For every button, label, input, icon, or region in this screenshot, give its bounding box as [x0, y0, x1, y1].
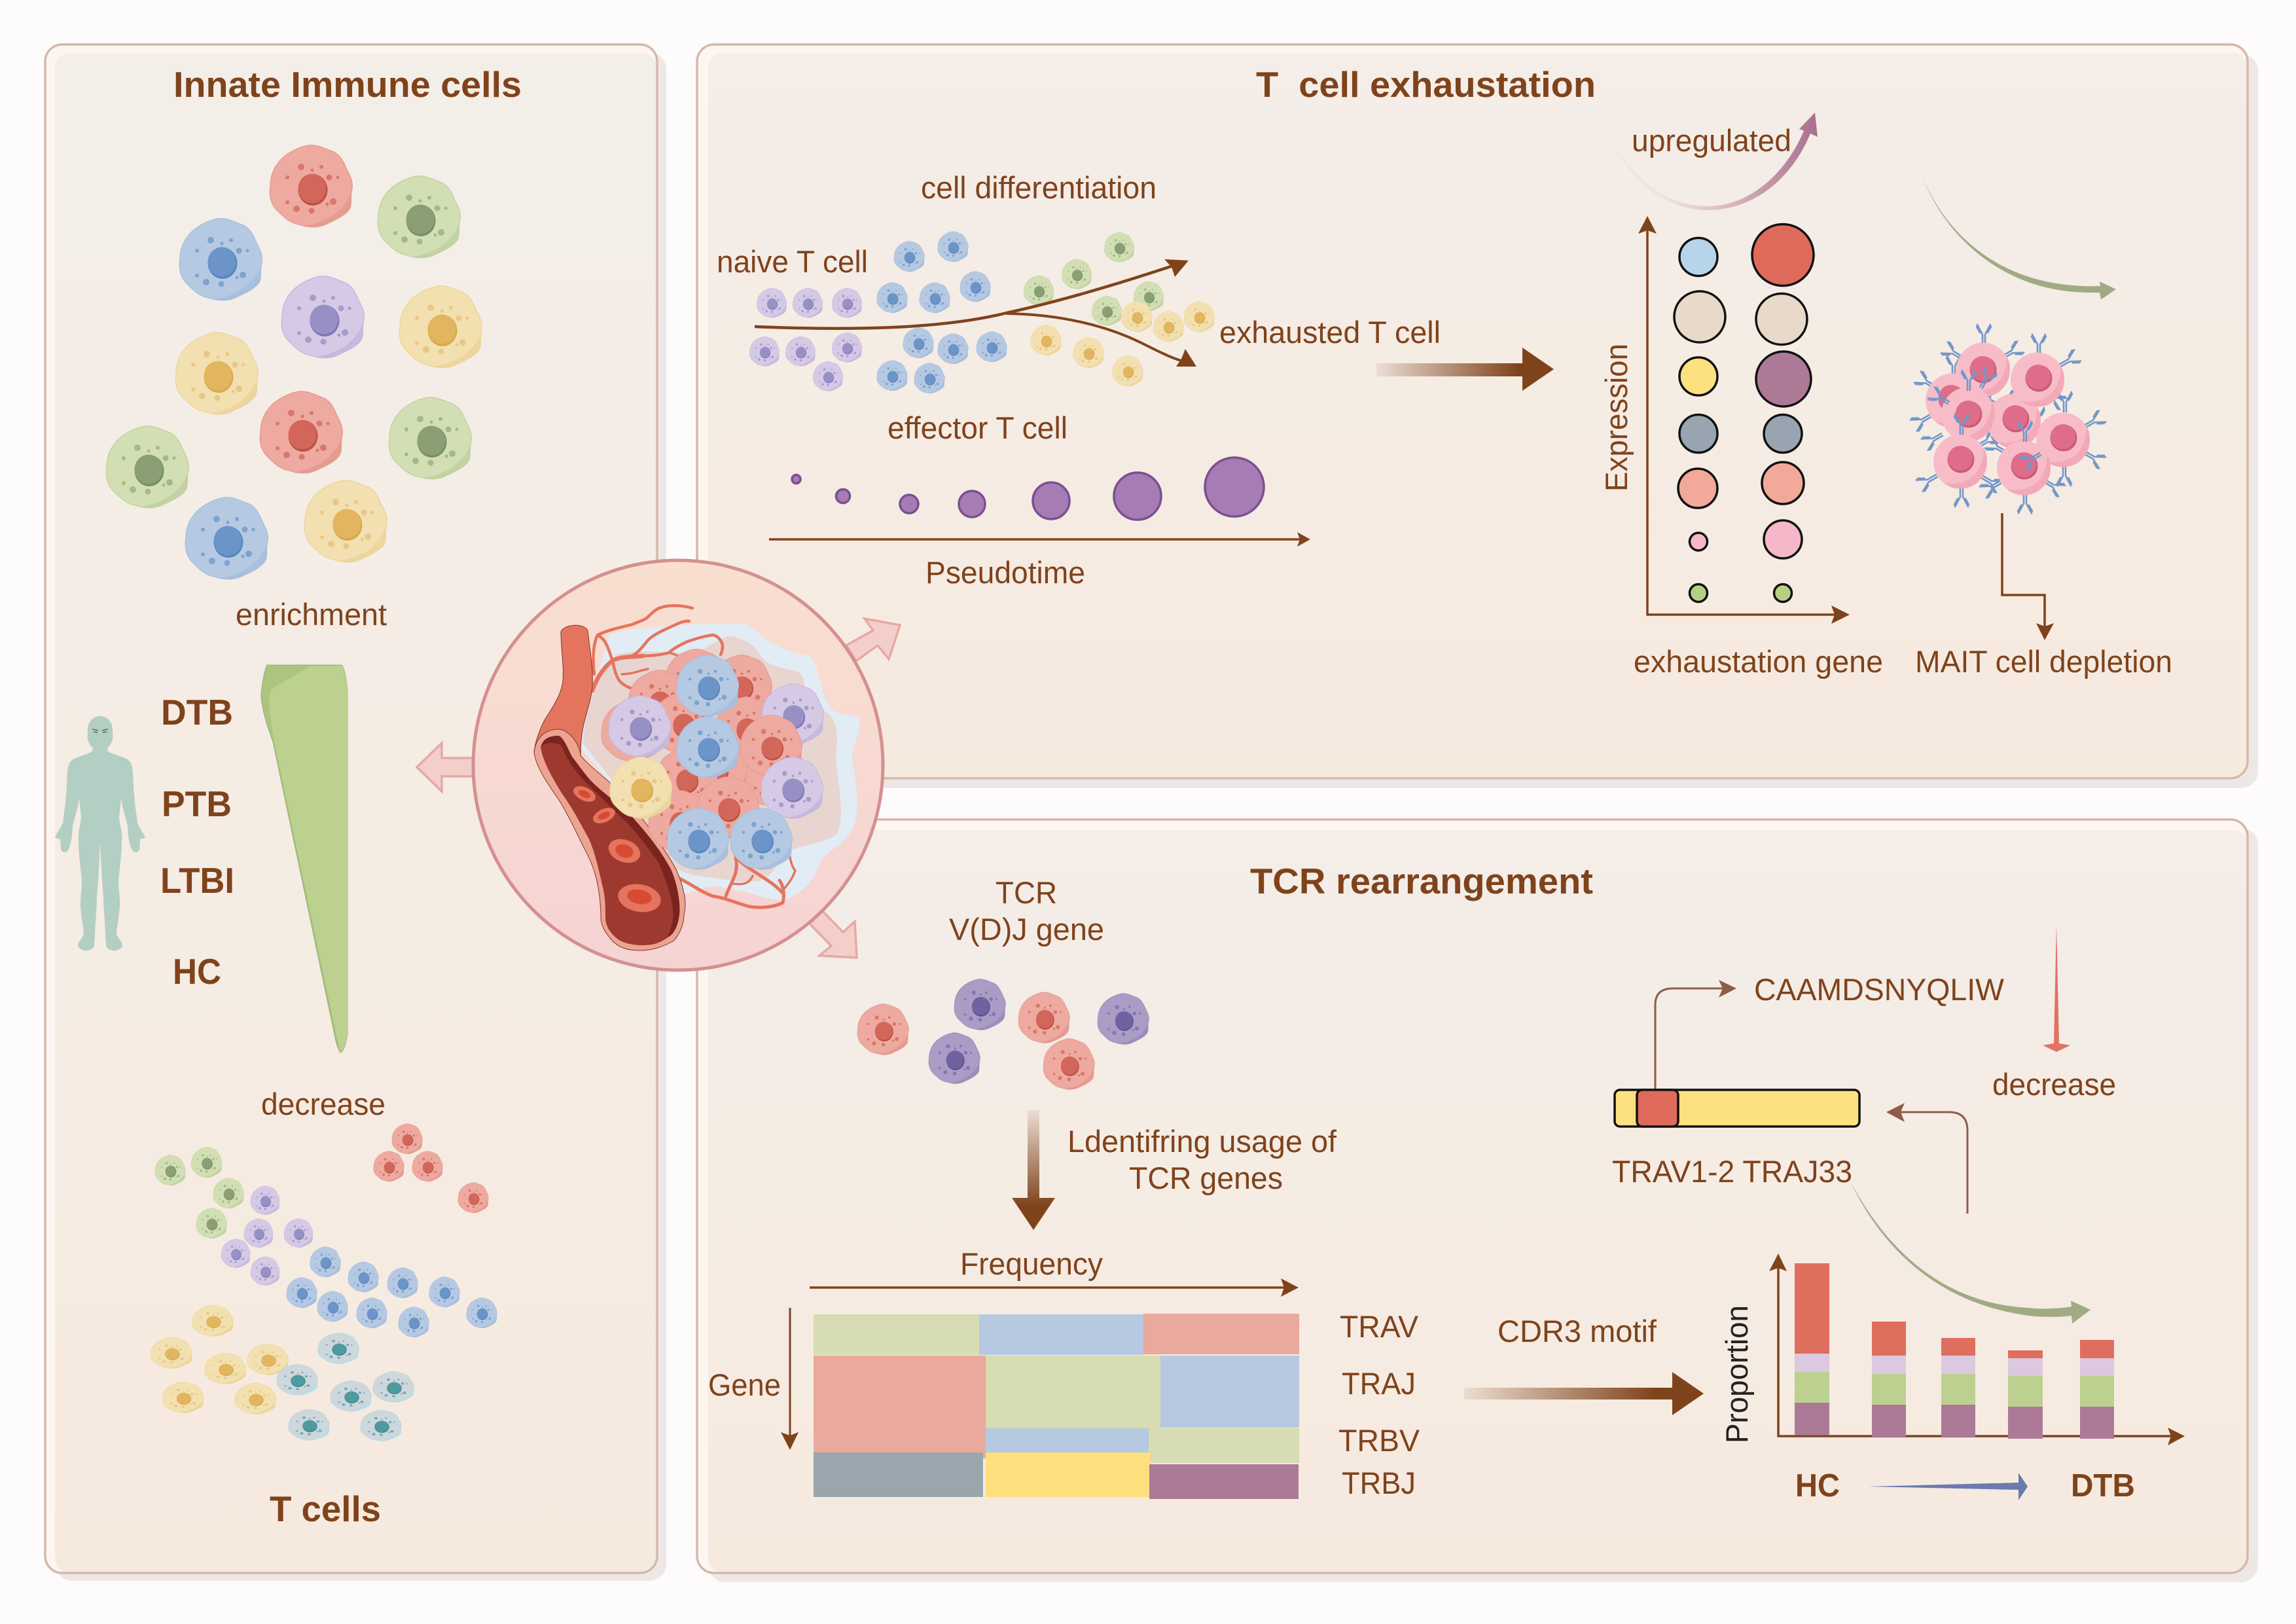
label: CDR3 sequence: CAAMDSNYQLIW: [1754, 972, 2005, 1007]
arrow: green decline curve: [1923, 178, 2116, 300]
red blood cells: [571, 783, 663, 915]
label: frequency: Frequency: [960, 1246, 1103, 1281]
arrow: elbow to MAIT depletion: [2002, 513, 2054, 640]
label: gene: Gene: [708, 1367, 781, 1402]
disease stage labels: DTB: [161, 692, 233, 732]
label: decrease: decrease: [261, 1087, 386, 1121]
vessel: lumen: [541, 736, 679, 945]
bar 1: [1795, 1263, 1829, 1435]
label: exhaustation gene: exhaustation gene: [1634, 644, 1883, 679]
chart: pseudotime dots: [792, 458, 1264, 520]
label: naive T cell: naive T cell: [717, 244, 868, 279]
label: proportion: Proportion: [1719, 1305, 1754, 1443]
label: decrease: decrease: [1992, 1067, 2116, 1102]
treemap gene labels: TRAV: [1340, 1309, 1419, 1344]
disease stage labels: LTBI: [160, 860, 234, 901]
label: pseudotime: Pseudotime: [925, 555, 1085, 590]
label: expression: Expression: [1599, 344, 1634, 492]
immune cell cluster: [601, 649, 823, 869]
MAIT cell cluster: [1910, 325, 2106, 513]
panel: T cell exhaustation: [697, 45, 2258, 788]
differentiating T cells: [749, 232, 1214, 393]
antibodies behind cells: [1910, 325, 2106, 513]
vessel: lumen shadow: [541, 736, 679, 937]
chart: stacked bars: [1769, 1254, 2185, 1445]
arrow: gene axis: [781, 1308, 798, 1450]
treemap gene labels: TRBJ: [1342, 1466, 1416, 1500]
label: CDR3 motif: CDR3 motif: [1498, 1314, 1657, 1348]
treemap gene labels: TRBV: [1338, 1423, 1420, 1458]
circle background: [473, 560, 883, 970]
label: HC: HC: [1795, 1468, 1840, 1504]
arrow: to innate immune panel: [417, 743, 475, 791]
bubbles: [1674, 224, 1814, 602]
enriched innate cells: [106, 145, 482, 579]
label: exhausted T cell: exhausted T cell: [1219, 315, 1441, 350]
arrows: differentiation trajectory: [755, 259, 1196, 367]
arrow: frequency axis: [810, 1278, 1299, 1297]
label: T cells: T cells: [270, 1489, 381, 1529]
arrow: to exhaustion genes: [1376, 348, 1554, 391]
disease stage labels: HC: [173, 951, 221, 992]
heading: innate immune cells: Innate Immune cells: [173, 64, 522, 105]
chart axes: [1769, 1254, 2185, 1445]
label: identifying usage of TCR genes: [1067, 1124, 1337, 1195]
label: effector T cell: effector T cell: [888, 410, 1067, 445]
arrow: pseudotime axis: [769, 532, 1310, 547]
arrow: to T cell exhaustation panel: [846, 619, 900, 661]
panel: innate immune cells: [45, 45, 666, 1581]
chart: gene usage treemap: [814, 1314, 1299, 1499]
arrow: elbow to motif sequence: [1655, 980, 1736, 1090]
arrow: green decline curve: [1850, 1182, 2090, 1324]
bar 2: [1872, 1322, 1906, 1437]
label: TCR V(D)J gene: TCR: [996, 875, 1057, 910]
arrow: upregulated curve: [1602, 113, 1818, 210]
label: TCR V(D)J gene: [949, 875, 1104, 947]
vessel: artery: [534, 625, 592, 755]
arrow: decrease: [2043, 924, 2070, 1052]
heading: TCR rearrangement: TCR rearrangement: [1250, 861, 1593, 901]
label: identifying usage of TCR genes: Ldentifring usage of: [1067, 1124, 1337, 1159]
disease stage labels: PTB: [162, 784, 232, 824]
bar 4: [2008, 1350, 2043, 1439]
label: TRAV1-2 TRAJ33: TRAV1-2 TRAJ33: [1612, 1154, 1852, 1189]
vessel: vein outer wall: [534, 729, 685, 950]
chart: exhaustion gene bubbles: [1638, 216, 1850, 624]
treemap gene labels: [1338, 1309, 1420, 1500]
central illustration: tissue and blood vessel: [473, 560, 883, 970]
tissue inner: [583, 636, 841, 882]
icon: human body: [55, 716, 145, 950]
pink cells: [1926, 343, 2090, 496]
label: DTB: DTB: [2071, 1468, 2135, 1504]
wedge: gradient of disease severity: [261, 665, 348, 1053]
bar 3: [1941, 1338, 1975, 1437]
arrow: elbow back to gene bar: [1886, 1103, 1967, 1214]
bar 5: [2080, 1340, 2114, 1439]
TCR cells: [857, 979, 1149, 1089]
gene bar: TRAV1-2 TRAJ33: [1615, 1090, 1859, 1127]
label: enrichment: enrichment: [236, 597, 387, 632]
arrow: CDR3 motif to proportions: [1464, 1372, 1704, 1415]
arrow: to TCR rearrangement panel: [810, 911, 857, 958]
antibodies in front of cells: [1928, 367, 2043, 471]
heading: T cell exhaustation: T cell exhaustation: [1256, 64, 1596, 105]
scattered T cells: [151, 1124, 497, 1441]
arrow: HC to DTB: [1868, 1473, 2028, 1500]
disease stage labels: [160, 692, 234, 992]
treemap gene labels: TRAJ: [1342, 1366, 1416, 1401]
label: MAIT cell depletion: MAIT cell depletion: [1915, 644, 2172, 679]
label: TCR V(D)J gene: V(D)J gene: [949, 912, 1104, 947]
chart axes: [1638, 216, 1850, 624]
arrow: identifying usage: [1012, 1110, 1055, 1230]
panel: TCR rearrangement: [697, 820, 2258, 1582]
label: cell differentiation: cell differentiation: [921, 170, 1157, 205]
tissue halo: [576, 623, 859, 900]
label: upregulated: upregulated: [1632, 123, 1791, 158]
capillaries: [592, 605, 795, 907]
label: identifying usage of TCR genes: TCR genes: [1129, 1161, 1283, 1195]
